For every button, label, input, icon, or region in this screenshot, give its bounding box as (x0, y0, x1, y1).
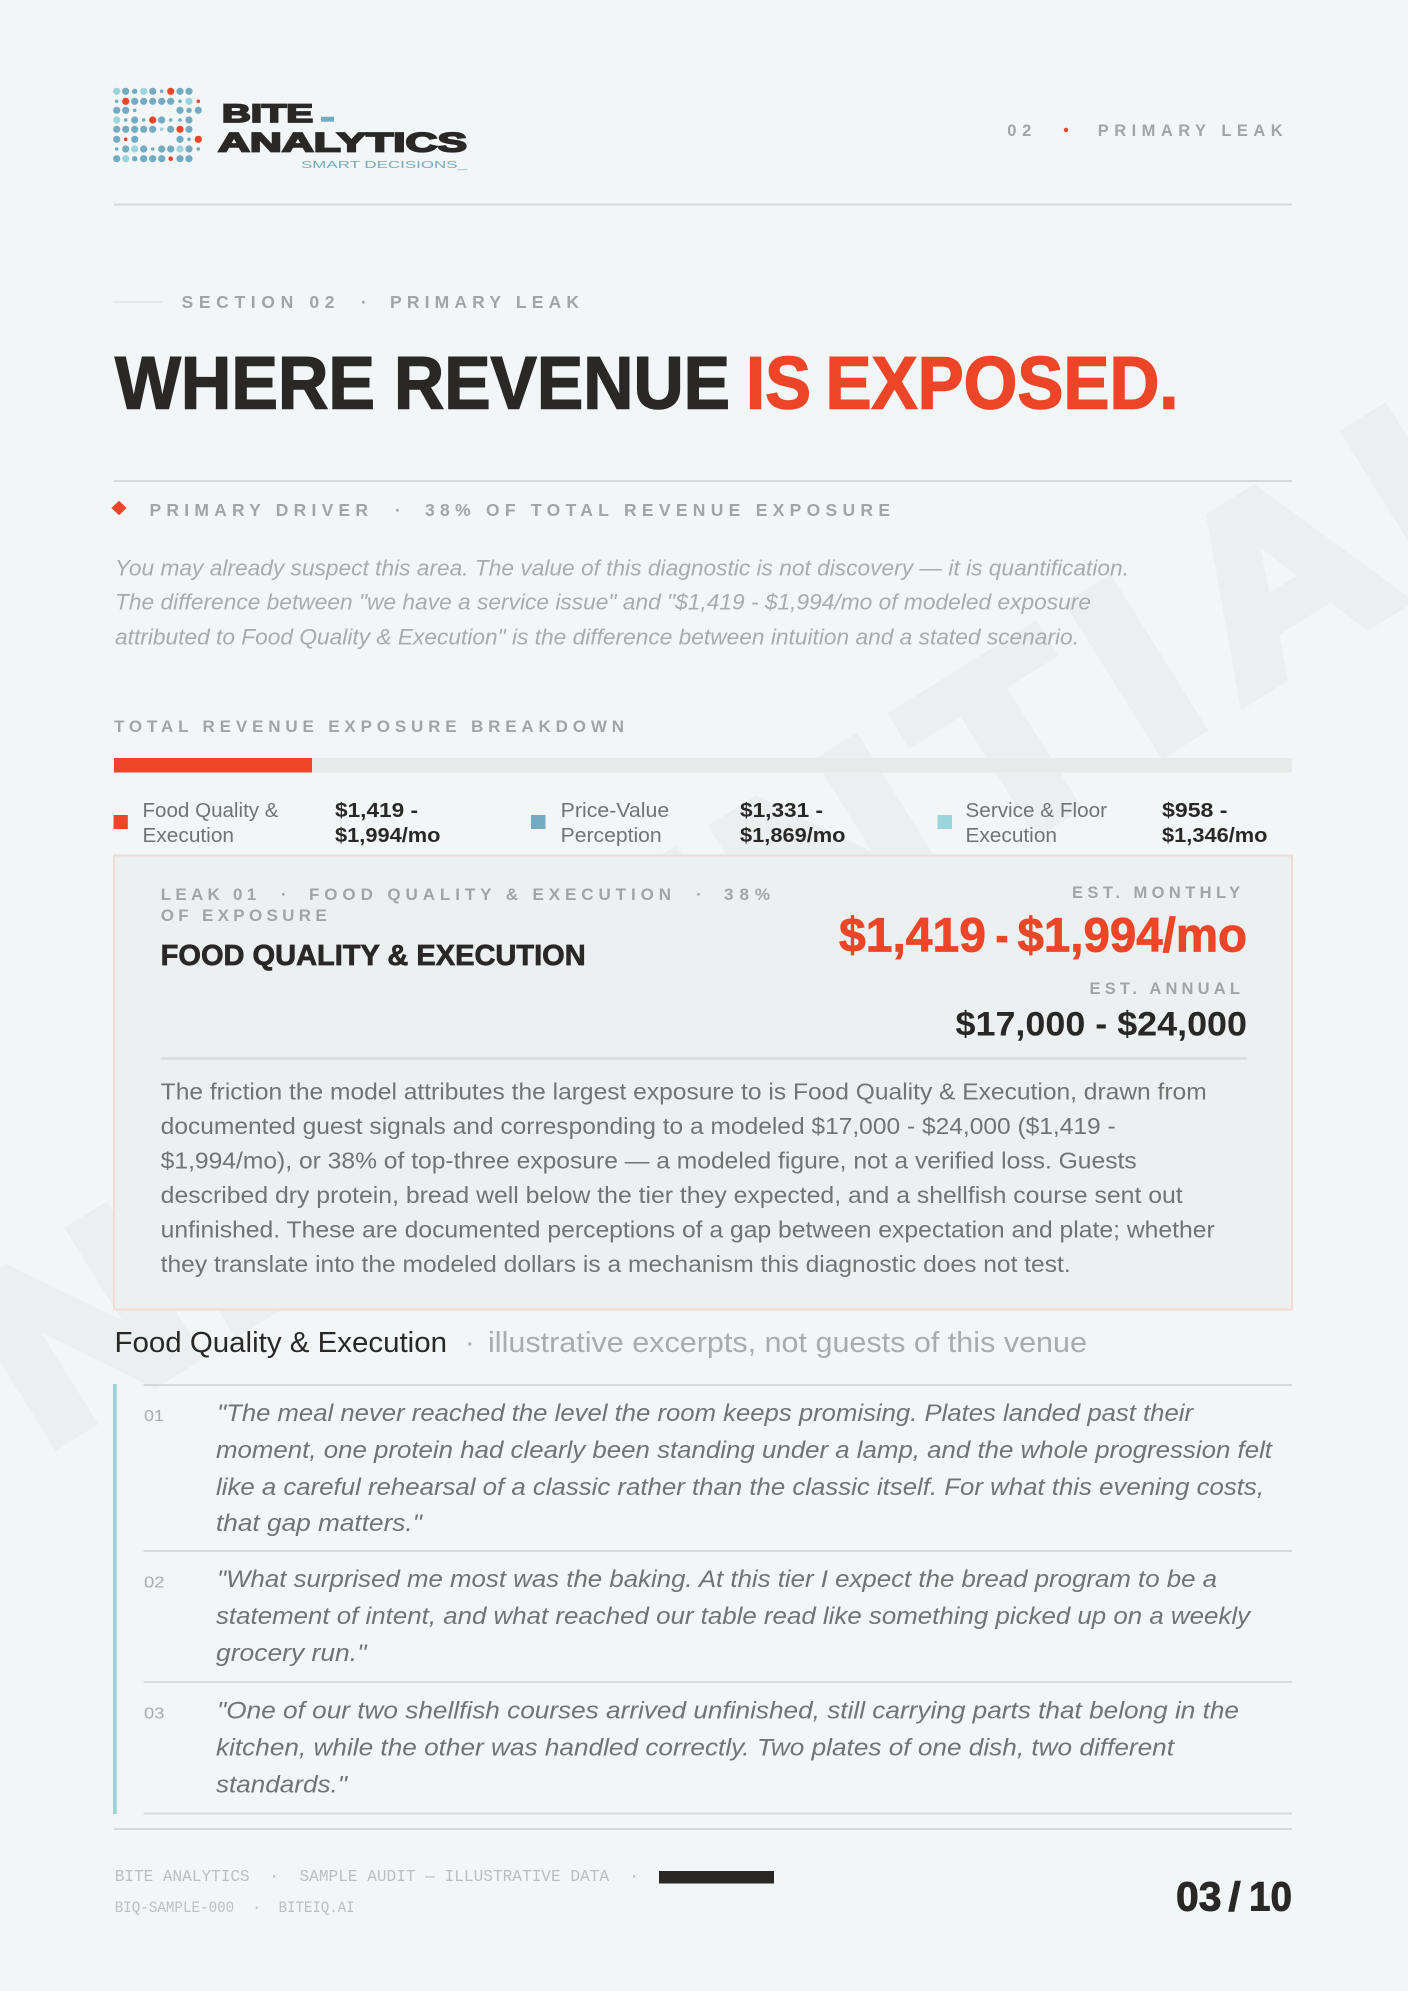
legend item: price-value: $1,331 - (740, 800, 823, 822)
primary driver label: PRIMARY DRIVER (150, 500, 368, 520)
section eyebrow (113, 292, 579, 312)
quote 03: 03 (144, 1706, 164, 1722)
legend item: service and floor (938, 800, 1268, 847)
quote 01: "The meal never reached the level the room keeps promising. Plates landed past their (217, 1400, 1194, 1427)
quote 01: that gap matters." (216, 1510, 424, 1537)
excerpts heading (114, 1327, 1087, 1359)
intro paragraph: attributed to Food Quality & Execution" is the difference between intuition and a stated scenario. (115, 624, 1079, 650)
card eyebrow (161, 885, 770, 925)
quote 01: like a careful rehearsal of a classic rather than the classic itself. For what this evening costs, (216, 1474, 1264, 1501)
page number: 03 (1176, 1874, 1222, 1920)
section eyebrow: SECTION 02 (182, 292, 335, 312)
card eyebrow: 38% (724, 885, 770, 904)
legend (114, 800, 1268, 847)
footer meta (115, 1868, 774, 1917)
excerpts heading: illustrative excerpts, not guests of this venue (488, 1327, 1087, 1359)
logo wordmark (218, 100, 467, 171)
page number (1176, 1874, 1292, 1920)
title: EXPOSED. (826, 342, 1178, 425)
header: section tag: 02 (1007, 122, 1031, 140)
quote 02: 02 (144, 1574, 164, 1591)
panel: guest excerpts (113, 1384, 1292, 1814)
footer meta: BIQ-SAMPLE-000 (115, 1899, 234, 1917)
legend item: service and floor: $1,346/mo (1162, 825, 1268, 847)
breakdown heading: TOTAL REVENUE EXPOSURE BREAKDOWN (114, 717, 624, 736)
section eyebrow: PRIMARY LEAK (390, 292, 579, 312)
monthly estimate: - (996, 908, 1008, 962)
logo wordmark: SMART DECISIONS_ (301, 159, 467, 171)
monthly estimate: $1,419 (839, 908, 986, 962)
footer meta: SAMPLE AUDIT — ILLUSTRATIVE DATA (300, 1868, 610, 1887)
logo wordmark: ANALYTICS (218, 128, 467, 158)
panel: leak 01 card (114, 856, 1292, 1310)
page number: / (1228, 1874, 1241, 1920)
card body text: $1,994/mo), or 38% of top-three exposure — a modeled figure, not a verified loss. Guests (161, 1148, 1137, 1174)
intro paragraph (115, 556, 1129, 650)
legend item: price-value: Price-Value (561, 800, 669, 822)
title: REVENUE (394, 342, 730, 425)
monthly estimate (839, 884, 1247, 962)
logo wordmark: BITE (222, 100, 313, 128)
footer meta: · (252, 1899, 261, 1917)
legend item: food quality (114, 800, 440, 847)
card eyebrow: · (281, 885, 287, 904)
annual estimate: $17,000 - $24,000 (956, 1006, 1247, 1044)
section eyebrow: · (361, 292, 367, 312)
excerpts heading: · (465, 1327, 475, 1359)
footer meta: BITE ANALYTICS (115, 1868, 250, 1887)
title: IS (746, 342, 811, 425)
monthly estimate: $1,994/mo (1018, 908, 1247, 962)
card body text: they translate into the modeled dollars is a mechanism this diagnostic does not test. (161, 1251, 1071, 1277)
redacted block (659, 1871, 774, 1884)
legend item: service and floor: $958 - (1162, 800, 1228, 822)
legend item: price-value: $1,869/mo (740, 825, 846, 847)
card body text: unfinished. These are documented perceptions of a gap between expectation and plate; whether (161, 1216, 1215, 1242)
quote 01: 01 (144, 1408, 164, 1425)
stacked exposure bar (114, 758, 1292, 772)
intro paragraph: The difference between "we have a service issue" and "$1,419 - $1,994/mo of modeled exposure (115, 590, 1091, 614)
monthly estimate: EST. MONTHLY (1072, 884, 1240, 902)
card body text: The friction the model attributes the largest exposure to is Food Quality & Execution, drawn from (161, 1078, 1207, 1104)
card eyebrow: · (696, 885, 702, 904)
card eyebrow: LEAK 01 (161, 885, 256, 904)
excerpts heading: Food Quality & Execution (114, 1327, 447, 1359)
quote 03 (144, 1698, 1239, 1798)
quote 02 (144, 1566, 1252, 1667)
quote 01 (144, 1400, 1273, 1537)
footer meta: · (629, 1868, 639, 1887)
quote 02: grocery run." (216, 1640, 368, 1667)
card body text: described dry protein, bread well below the tier they expected, and a shellfish course sent out (161, 1182, 1183, 1208)
icon: diamond (111, 501, 127, 515)
header: section tag: PRIMARY LEAK (1098, 122, 1283, 140)
title (115, 342, 1178, 425)
quote 01: moment, one protein had clearly been standing under a lamp, and the whole progression felt (216, 1437, 1273, 1464)
legend item: service and floor: Execution (966, 825, 1057, 847)
quote 03: standards." (216, 1772, 349, 1798)
annual estimate: EST. ANNUAL (1090, 980, 1240, 998)
intro paragraph: You may already suspect this area. The value of this diagnostic is not discovery — it is quantification. (115, 556, 1129, 580)
icon: dot matrix logo mark (113, 88, 202, 162)
card body text (161, 1078, 1215, 1277)
footer meta: · (269, 1868, 279, 1887)
quote 03: kitchen, while the other was handled correctly. Two plates of one dish, two different (216, 1734, 1175, 1762)
legend item: food quality: Execution (142, 825, 234, 847)
legend item: food quality: $1,419 - (335, 800, 418, 822)
legend item: price-value: Perception (561, 825, 662, 847)
legend item: food quality: $1,994/mo (335, 825, 440, 847)
primary driver label (111, 500, 890, 520)
footer meta: BITEIQ.AI (279, 1899, 355, 1917)
legend item: food quality: Food Quality & (142, 800, 279, 822)
card eyebrow: OF EXPOSURE (161, 906, 327, 925)
card eyebrow: FOOD QUALITY & EXECUTION (309, 885, 671, 904)
primary driver label: · (395, 500, 401, 520)
quote 03: "One of our two shellfish courses arrived unfinished, still carrying parts that belong in the (217, 1698, 1239, 1724)
legend item: service and floor: Service & Floor (966, 800, 1107, 822)
header: section tag (1007, 122, 1283, 140)
legend item: price-value (531, 800, 846, 847)
card heading: FOOD QUALITY & EXECUTION (161, 940, 586, 972)
header: logo (113, 88, 467, 171)
card body text: documented guest signals and corresponding to a modeled $17,000 - $24,000 ($1,419 - (161, 1113, 1116, 1139)
quote 02: statement of intent, and what reached our table read like something picked up on a weekly (216, 1603, 1252, 1630)
primary driver label: 38% OF TOTAL REVENUE EXPOSURE (425, 500, 890, 520)
page number: 10 (1249, 1874, 1292, 1920)
title: WHERE (115, 342, 375, 425)
quote 02: "What surprised me most was the baking. At this tier I expect the bread program to be a (217, 1566, 1217, 1593)
annual estimate (956, 980, 1247, 1044)
